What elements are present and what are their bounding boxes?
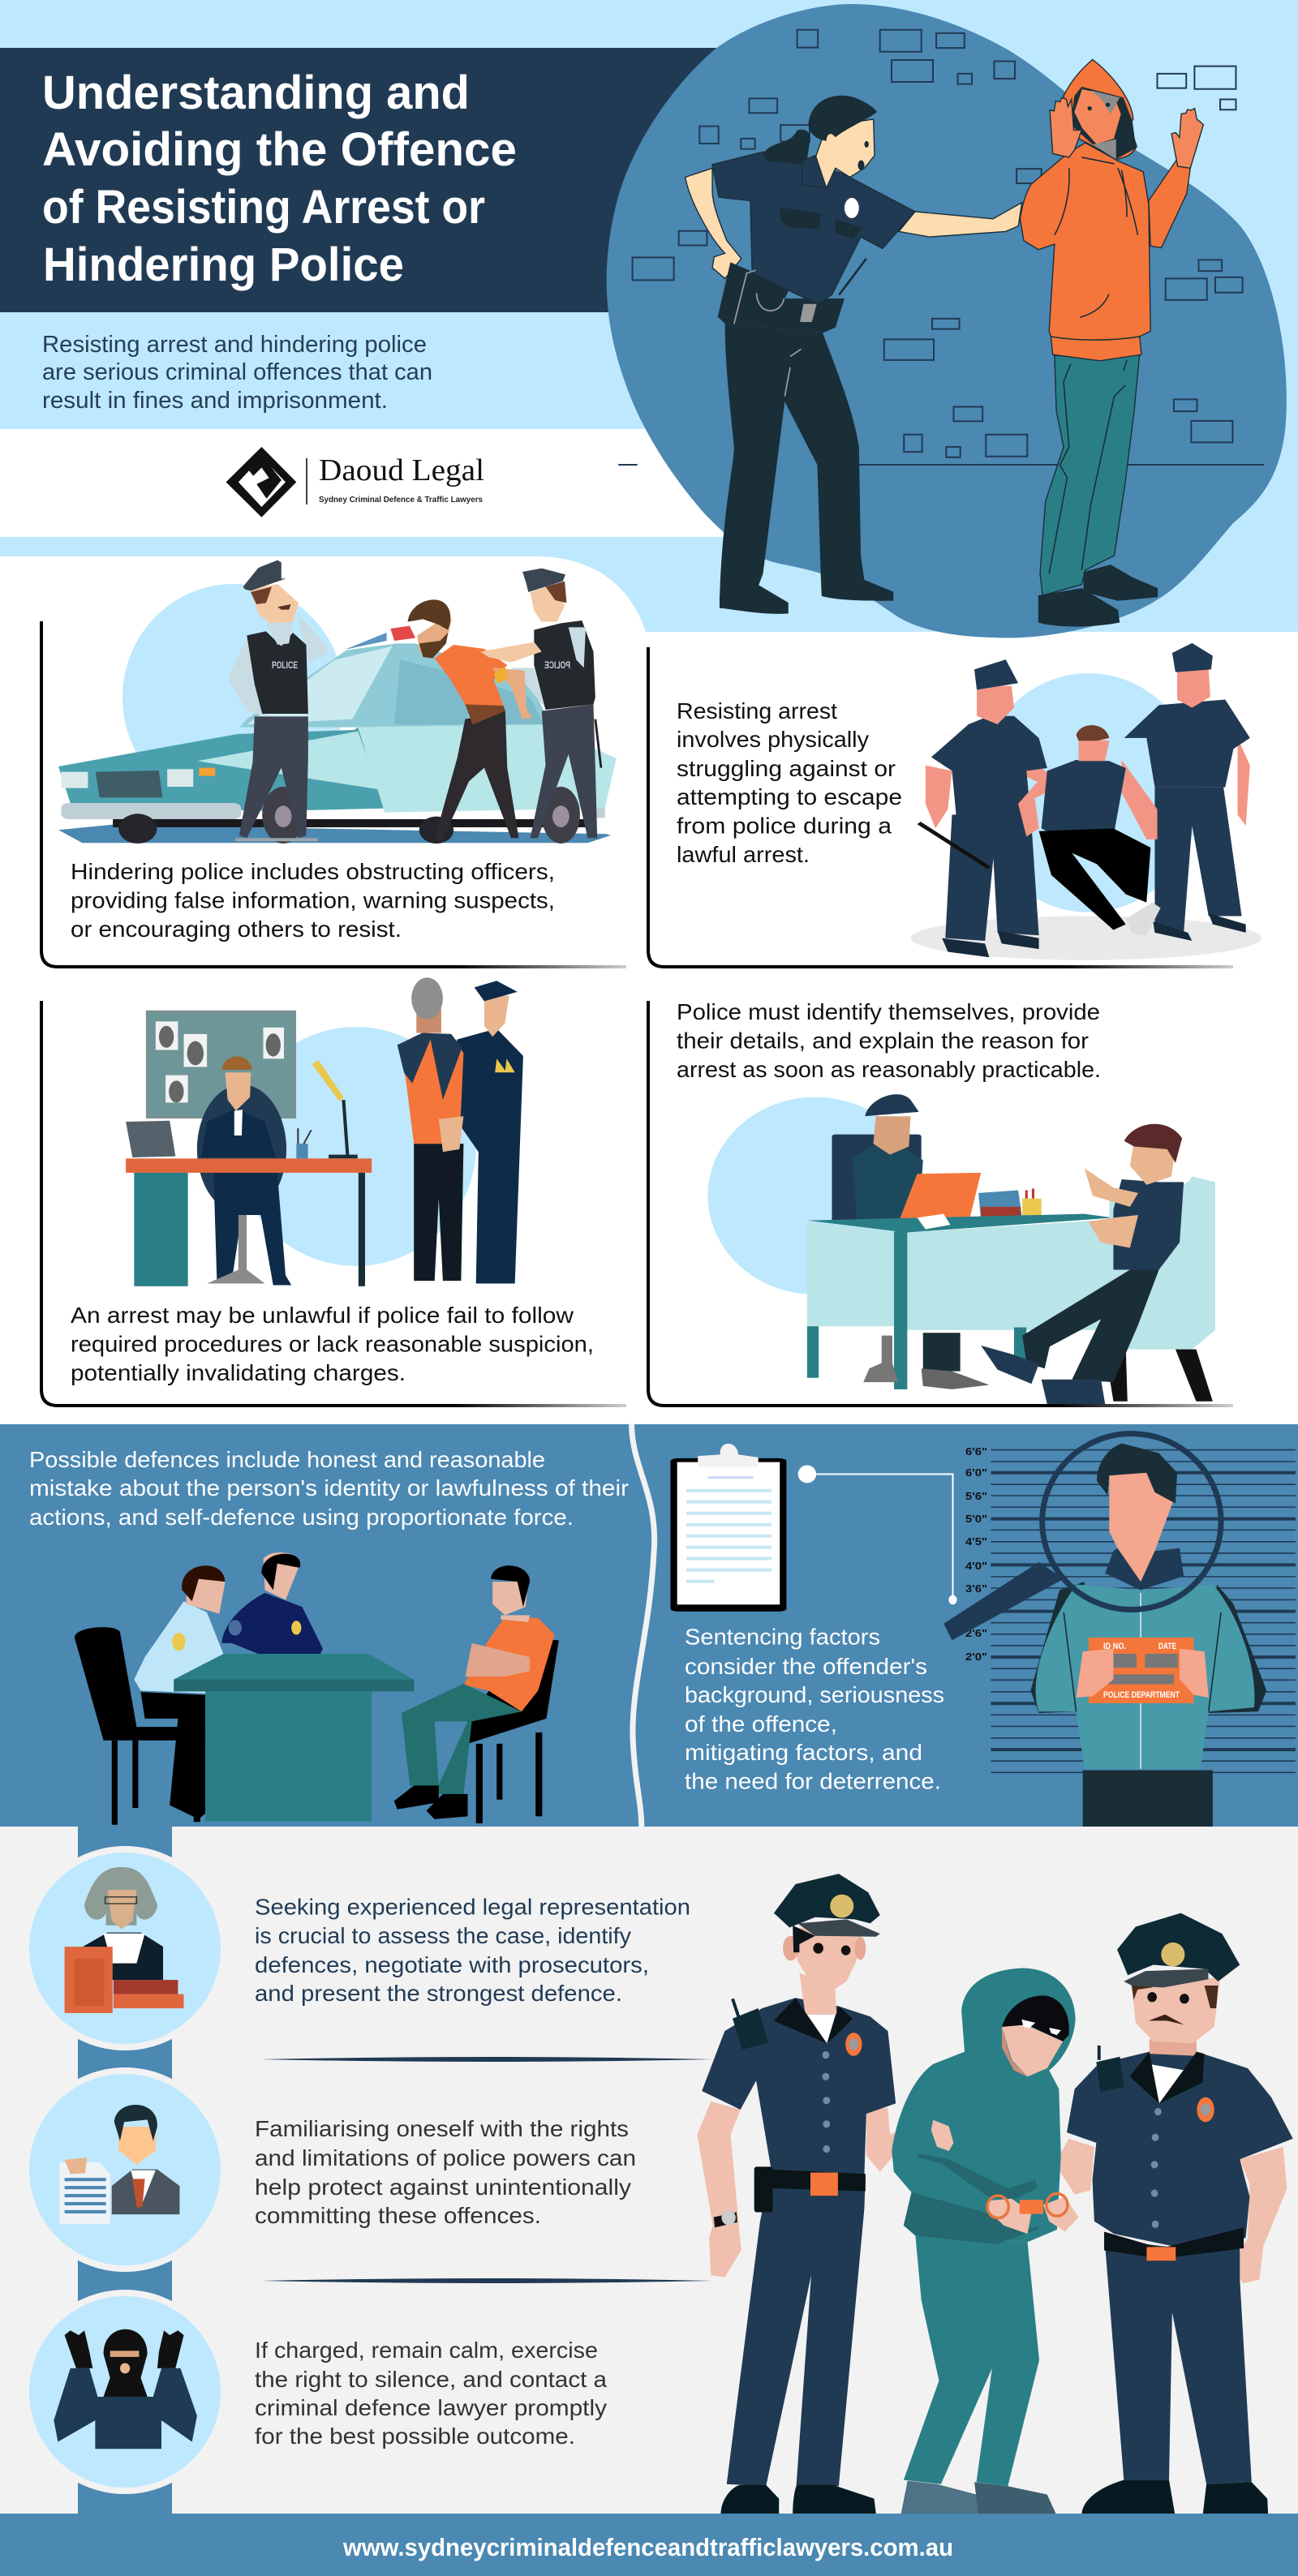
- tips text 3: [255, 2338, 607, 2449]
- tips text 1: defences, negotiate with prosecutors,: [255, 1952, 649, 1977]
- card 4 illustration: police interview: [707, 1094, 1215, 1404]
- defences text: actions, and self-defence using proportionate force.: [29, 1505, 574, 1530]
- main title: Understanding and: [42, 67, 470, 119]
- tips text 1: is crucial to assess the case, identify: [255, 1923, 631, 1948]
- defences text: mistake about the person's identity or lawfulness of their: [29, 1475, 629, 1501]
- white cards panel: [0, 556, 1298, 1424]
- blue section background: [0, 1424, 1298, 1827]
- tips text 2: and limitations of police powers can: [255, 2145, 636, 2170]
- tips text 2: Familiarising oneself with the rights: [255, 2116, 629, 2141]
- height chart labels: 4'0": [965, 1560, 987, 1572]
- card 1 text: providing false information, warning suspects,: [71, 887, 555, 913]
- subtitle: are serious criminal offences that can: [42, 359, 432, 385]
- height chart labels: 3'6": [965, 1582, 987, 1595]
- card 1 vest labels: POLICE: [272, 659, 298, 671]
- tips text 2: committing these offences.: [255, 2203, 541, 2228]
- footer: [0, 2514, 1298, 2576]
- tips text 2: help protect against unintentionally: [255, 2175, 631, 2200]
- sentencing text: the need for deterrence.: [685, 1768, 941, 1794]
- tips text 2: [255, 2116, 636, 2228]
- arrest illustration: left officer: [697, 1874, 896, 2514]
- card 2 text: struggling against or: [677, 756, 896, 781]
- card 3 text: potentially invalidating charges.: [71, 1360, 406, 1385]
- id placard text: DATE: [1158, 1642, 1176, 1651]
- subtitle: Resisting arrest and hindering police: [42, 332, 427, 358]
- dividers: [261, 2057, 712, 2283]
- card 1 text: Hindering police includes obstructing officers,: [71, 859, 555, 884]
- card 2 text: attempting to escape: [677, 784, 902, 809]
- card 1 text: or encouraging others to resist.: [71, 917, 402, 942]
- clipboard: [671, 1444, 786, 1612]
- defences text: Possible defences include honest and reasonable: [29, 1447, 545, 1472]
- tips text 3: the right to silence, and contact a: [255, 2367, 607, 2392]
- logo: Sydney Criminal Defence & Traffic Lawyers: [319, 496, 483, 504]
- height chart labels: 2'0": [965, 1651, 987, 1663]
- card 1 illustration: police car arrest: [58, 560, 617, 844]
- sentencing text: mitigating factors, and: [685, 1740, 922, 1765]
- arrest illustration: right officer: [1055, 1913, 1293, 2514]
- card 2 text: lawful arrest.: [677, 842, 810, 867]
- logo: [226, 447, 484, 517]
- card 1 vest labels: [272, 659, 570, 671]
- card 2 text: from police during a: [677, 813, 892, 839]
- main title: Hindering Police: [43, 238, 404, 291]
- card 2 text: Resisting arrest: [677, 698, 837, 723]
- circle 3: masked robber: [23, 2290, 227, 2494]
- height chart labels: 6'0": [965, 1466, 987, 1479]
- hero blob: [607, 4, 1287, 638]
- brick wall pattern: [618, 30, 1264, 465]
- vertical strip: [78, 1827, 172, 2514]
- main title: Avoiding the Offence: [42, 123, 517, 176]
- card 1 vest labels: POLICE: [544, 659, 570, 671]
- footer url: www.sydneycriminaldefenceandtrafficlawyers.com.au: [342, 2533, 953, 2561]
- height chart labels: 2'6": [965, 1627, 987, 1639]
- hero illustration: man in orange hoodie: [1020, 59, 1203, 627]
- card 4 text: their details, and explain the reason for: [677, 1028, 1089, 1054]
- sentencing text: [685, 1624, 944, 1794]
- height chart lines: [931, 1450, 1298, 1827]
- card frames: [41, 621, 1233, 1406]
- main title: of Resisting Arrest or: [42, 181, 485, 234]
- wavy divider: [632, 1423, 655, 1827]
- subtitle: result in fines and imprisonment.: [42, 388, 388, 414]
- sentencing text: background, seriousness: [685, 1682, 944, 1707]
- height chart labels: 5'6": [965, 1490, 987, 1502]
- card 3 text: [71, 1303, 594, 1385]
- connector line: [798, 1465, 957, 1604]
- tips text 1: Seeking experienced legal representation: [255, 1895, 690, 1919]
- tips text 3: criminal defence lawyer promptly: [255, 2395, 607, 2420]
- defences illustration: interview table: [75, 1552, 559, 1825]
- hero illustration: policewoman: [686, 96, 1022, 614]
- circle 2: man with document: [23, 2067, 227, 2272]
- circle 1: judge: [23, 1846, 227, 2050]
- id placard text: [1103, 1642, 1180, 1700]
- card 3 illustration: police office: [126, 977, 523, 1286]
- height chart labels: [965, 1445, 987, 1663]
- tips text 1: and present the strongest defence.: [255, 1981, 622, 2006]
- card 1 text: [71, 859, 555, 942]
- sentencing text: of the offence,: [685, 1711, 837, 1737]
- height chart labels: 5'0": [965, 1513, 987, 1525]
- card 2 illustration: officers holding suspect: [910, 643, 1261, 960]
- grey section background: [0, 1827, 1298, 2514]
- defences text: [29, 1447, 629, 1530]
- id placard text: ID NO.: [1103, 1642, 1126, 1651]
- id placard text: POLICE DEPARTMENT: [1103, 1690, 1180, 1700]
- card 4 text: Police must identify themselves, provide: [677, 999, 1100, 1024]
- card 4 text: arrest as soon as reasonably practicable.: [677, 1057, 1101, 1082]
- sentencing text: consider the offender's: [685, 1654, 927, 1679]
- height chart labels: 6'6": [965, 1445, 987, 1458]
- title band: [0, 48, 730, 312]
- arrest illustration: hooded suspect: [892, 1968, 1079, 2514]
- tips text 1: [255, 1895, 690, 2006]
- tips text 3: If charged, remain calm, exercise: [255, 2338, 598, 2363]
- subtitle: [42, 332, 432, 414]
- card 4 text: [677, 999, 1101, 1082]
- card 2 text: [677, 698, 902, 867]
- hero background: [0, 0, 1298, 641]
- card 3 text: required procedures or lack reasonable suspicion,: [71, 1332, 594, 1356]
- mugshot man with magnifier: [943, 1434, 1266, 1827]
- card 2 text: involves physically: [677, 727, 869, 752]
- card 3 text: An arrest may be unlawful if police fail to follow: [71, 1303, 574, 1328]
- tips text 3: for the best possible outcome.: [255, 2424, 575, 2449]
- height chart labels: 4'5": [965, 1535, 987, 1548]
- main title: [42, 67, 517, 291]
- logo: Daoud Legal: [319, 453, 484, 487]
- logo band: [0, 429, 730, 537]
- sentencing text: Sentencing factors: [685, 1624, 880, 1650]
